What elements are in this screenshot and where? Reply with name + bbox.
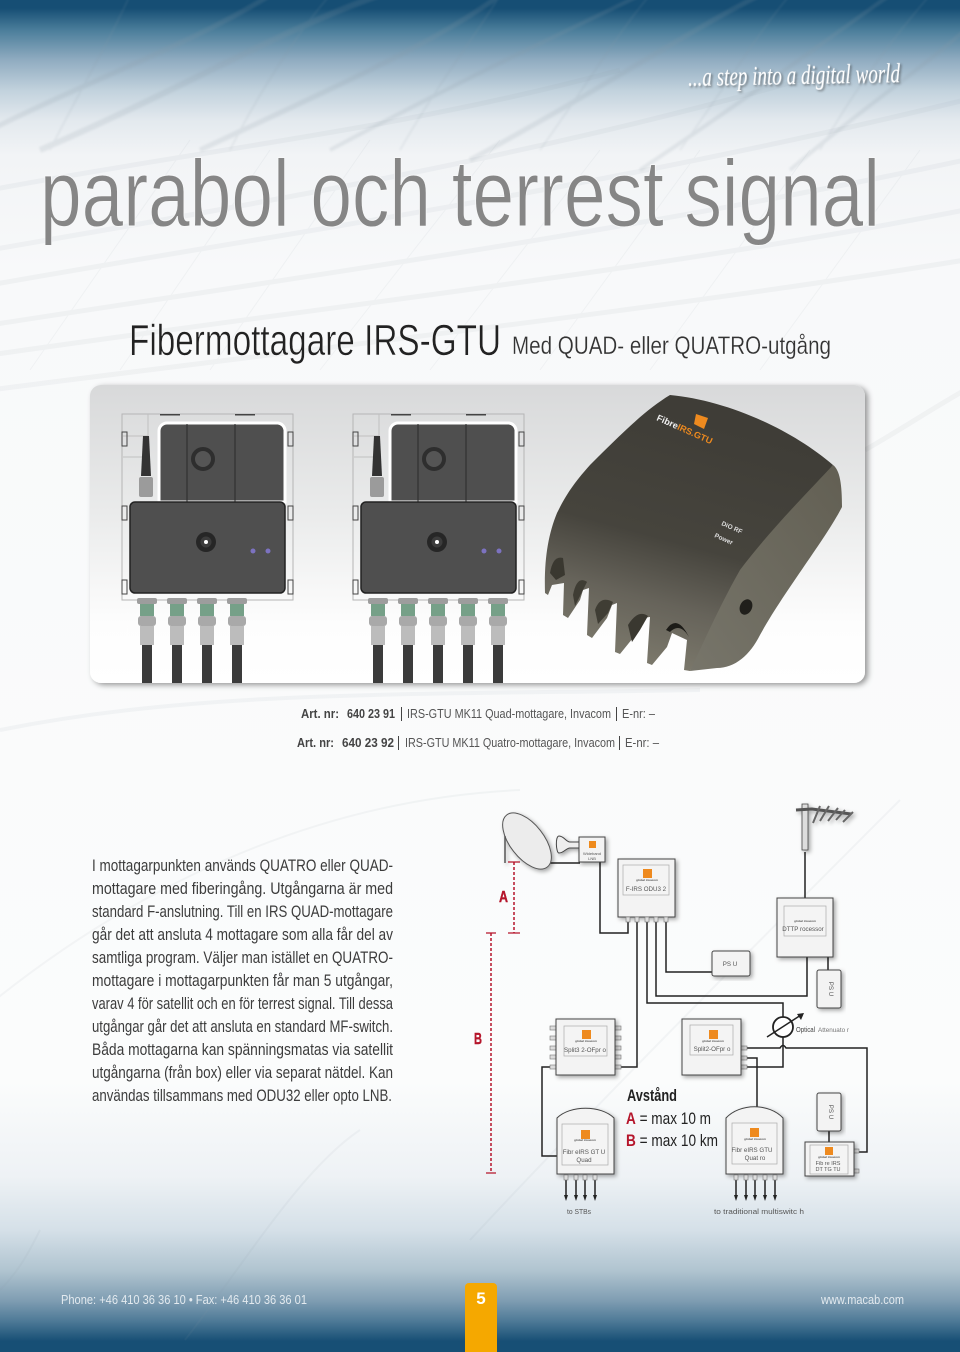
FibreIRS GTU Quatro: global invacom [744, 1137, 766, 1141]
photo: FibreIRS-GTU housing [545, 395, 842, 671]
FibreIRS GTU Quatro: Fibr eIRS GTU [732, 1147, 772, 1154]
body text: Båda mottagarna kan spänningsmatas via satellit [92, 1040, 393, 1059]
optical attenuator: Optical [796, 1027, 815, 1034]
body text: samtliga program. Väljer man istället en QUATRO- [92, 948, 393, 967]
photo: FibreIRS-GTU housing: Power [713, 532, 734, 547]
label: to traditional multiswitch: to traditional multiswitc h [714, 1207, 804, 1216]
icon: terrestrial antenna [796, 804, 853, 850]
FibreIRS DTTG TU: DT TG TU [815, 1167, 841, 1173]
subtitle: product name: Fibermottagare IRS-GTU [129, 316, 501, 365]
body text: I mottagarpunkten används QUATRO eller QUAD- [92, 856, 393, 875]
body text: standard F-anslutning. Till en IRS QUAD-mottagare [92, 902, 393, 921]
article line: quatro: 640 23 92 [342, 736, 394, 750]
DTTP processor [777, 898, 833, 957]
article line: quatro: Art. nr: [297, 736, 334, 750]
page number tab: 5 [476, 1289, 486, 1308]
F-IRS ODU32 unit: F-IRS ODU3 2 [626, 886, 667, 893]
PSU box vertical [817, 970, 841, 1008]
FibreIRS GTU Quatro [726, 1107, 783, 1201]
Split2 optical splitter [682, 1019, 747, 1075]
body text: mottagare i mottagarpunkten får man 5 utgångar, [92, 971, 393, 990]
article line: quad: Art. nr: [301, 707, 339, 721]
optical attenuator: Attenuato r [818, 1027, 850, 1034]
distance legend: Avstånd [627, 1086, 677, 1105]
footer contact: Phone: +46 410 36 36 10 • Fax: +46 410 36 36 01 [61, 1292, 307, 1307]
body text: användas tillsammans med ODU32 eller opto LNB. [92, 1086, 392, 1105]
FibreIRS GTU Quad [557, 1108, 614, 1201]
icon: wideband LNB: Wideband [583, 851, 601, 856]
footer website: www.macab.com [820, 1292, 904, 1307]
background swoosh pattern [0, 0, 960, 170]
photo: FibreIRS-GTU housing: DiO RF [720, 520, 743, 536]
article line: quatro [297, 736, 659, 750]
body text: mottagare med fiberingång. Utgångarna är med [92, 879, 393, 898]
FibreIRS GTU Quatro: Quat ro [745, 1155, 766, 1162]
F-IRS ODU32 unit: global invacom [636, 878, 658, 882]
dimension B: B [474, 1031, 482, 1048]
distance legend: B = max 10 km [626, 1131, 718, 1150]
FibreIRS GTU Quad: Fibr eIRS GT U [563, 1149, 605, 1156]
dimension A: A [499, 889, 508, 906]
body text: utgångar går det att ansluta en standard MF-switch. [92, 1017, 393, 1036]
cabling [542, 852, 867, 1156]
panel: product photos [90, 385, 865, 683]
DTTP processor: DTTP rocessor [782, 926, 824, 933]
article line: quad: 640 23 91 [347, 707, 395, 721]
FibreIRS DTTG TU [805, 1142, 859, 1176]
icon: wideband LNB: LNB [588, 856, 596, 861]
optical attenuator [767, 1013, 850, 1037]
FibreIRS GTU Quad: Quad [576, 1157, 592, 1164]
body text: utgångarna (från box) eller via separat nätdel. Kan [92, 1063, 393, 1082]
page number tab [465, 1283, 497, 1352]
PSU box: PS U [723, 961, 737, 968]
subtitle: product name: Med QUAD- eller QUATRO-utgång [512, 332, 831, 360]
Split2 optical splitter: global invacom [702, 1039, 724, 1043]
FibreIRS GTU Quad: global invacom [574, 1138, 596, 1142]
F-IRS ODU32 unit [618, 859, 675, 922]
photo: quad receiver with four outputs [122, 414, 293, 683]
PSU box [712, 951, 750, 976]
DTTP processor: global invacom [794, 919, 816, 923]
diagram: system connection [474, 804, 867, 1216]
body text: går det att ansluta 4 mottagare som alla får del av [92, 925, 393, 944]
photo: quatro receiver with five outputs [353, 414, 524, 683]
Split32 optical splitter [550, 1019, 621, 1075]
article line: quad: E-nr: – [622, 707, 655, 721]
dimension A [499, 862, 520, 933]
article line: quatro: E-nr: – [625, 736, 659, 750]
article line: quad: IRS-GTU MK11 Quad-mottagare, Invacom [407, 707, 611, 721]
body text [92, 856, 393, 1105]
FibreIRS DTTG TU: global invacom [818, 1155, 840, 1159]
PSU box lower [817, 1093, 841, 1131]
FibreIRS DTTG TU: Fib re IRS [816, 1161, 841, 1167]
PSU box lower: PS U [827, 1105, 834, 1119]
Split2 optical splitter: Split2-OFpr o [694, 1046, 731, 1053]
Split32 optical splitter: global invacom [575, 1039, 597, 1043]
distance legend: A = max 10 m [626, 1109, 711, 1128]
article line: quad [301, 707, 655, 721]
photo: FibreIRS-GTU housing: FibreIRS.GTU [655, 413, 714, 446]
Split32 optical splitter: Split3 2-OFpr o [564, 1047, 607, 1054]
label: to STBs: to STBs [567, 1207, 591, 1216]
PSU box vertical: PS U [827, 982, 834, 996]
body text: varav 4 för satellit och en för terrest signal. Till dessa [92, 994, 393, 1013]
distance legend [626, 1086, 718, 1150]
dimension B [474, 933, 496, 1173]
icon: wideband LNB [556, 836, 605, 862]
article line: quatro: IRS-GTU MK11 Quatro-mottagare, Invacom [405, 736, 615, 750]
icon: satellite dish [493, 805, 561, 877]
